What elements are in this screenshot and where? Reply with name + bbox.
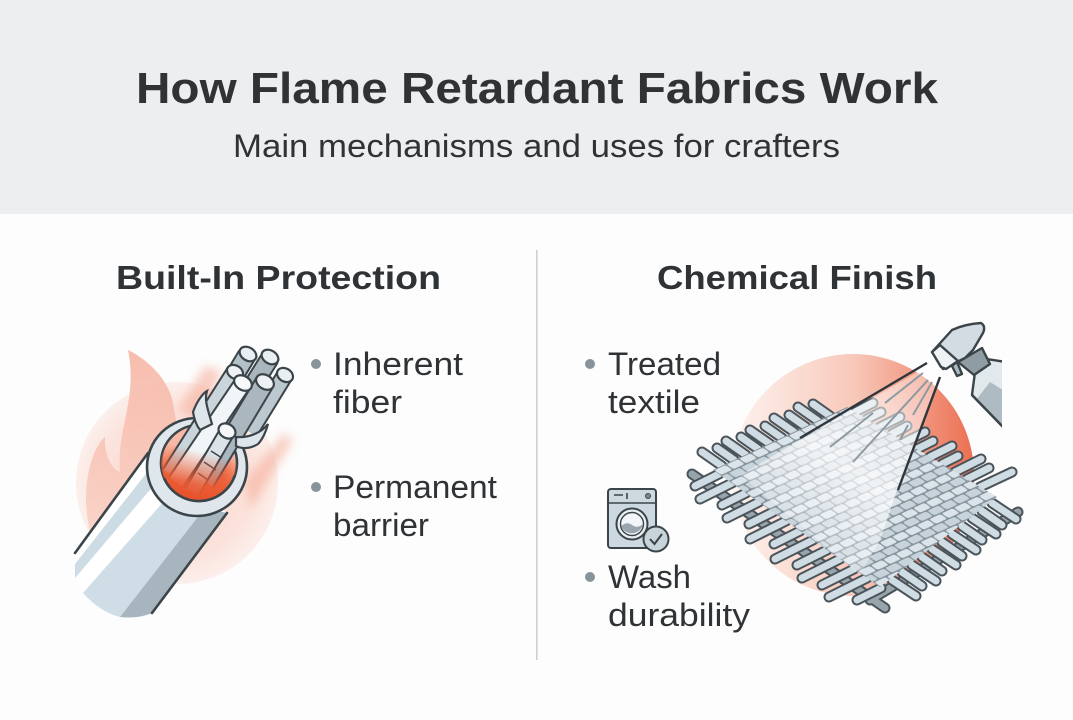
fiber strands <box>161 344 296 501</box>
bullet item: inherent fiber <box>311 346 463 420</box>
flames backdrop <box>76 350 292 592</box>
bullet item: permanent barrier: Permanent <box>333 469 497 505</box>
spray mist <box>740 363 941 575</box>
panel: chemical finish <box>585 259 1018 633</box>
bullet item: wash durability <box>585 559 750 633</box>
bullet item: inherent fiber: fiber <box>333 384 402 420</box>
header band <box>0 0 1073 214</box>
bullet item: permanent barrier: barrier <box>333 507 429 543</box>
bullet item: treated textile <box>585 346 721 420</box>
illustration: inherent fiber cable with flames <box>75 344 296 618</box>
bullet item: inherent fiber: Inherent <box>333 346 463 382</box>
heading: built-in protection: Built-In Protection <box>116 259 441 296</box>
title: How Flame Retardant Fabrics Work <box>136 64 939 113</box>
cable sheath <box>75 453 227 618</box>
sheath ring and glowing core <box>147 418 247 516</box>
woven fabric <box>692 403 1018 608</box>
bullet item: wash durability: Wash <box>608 559 691 595</box>
heat disc <box>732 354 974 596</box>
illustration: spray on woven fabric <box>692 323 1018 608</box>
subtitle: Main mechanisms and uses for crafters <box>233 128 840 164</box>
spray bottle <box>932 323 1006 430</box>
panel: built-in protection <box>75 259 497 618</box>
icon: washing machine with check <box>608 489 668 552</box>
bullet item: treated textile: textile <box>608 384 700 420</box>
bullet item: wash durability: durability <box>608 597 750 633</box>
bullet item: permanent barrier <box>311 469 497 543</box>
bullet list: built-in <box>311 346 497 543</box>
bullet item: treated textile: Treated <box>608 346 721 382</box>
bullet list: chemical finish <box>585 346 750 633</box>
heading: chemical finish: Chemical Finish <box>657 259 937 296</box>
